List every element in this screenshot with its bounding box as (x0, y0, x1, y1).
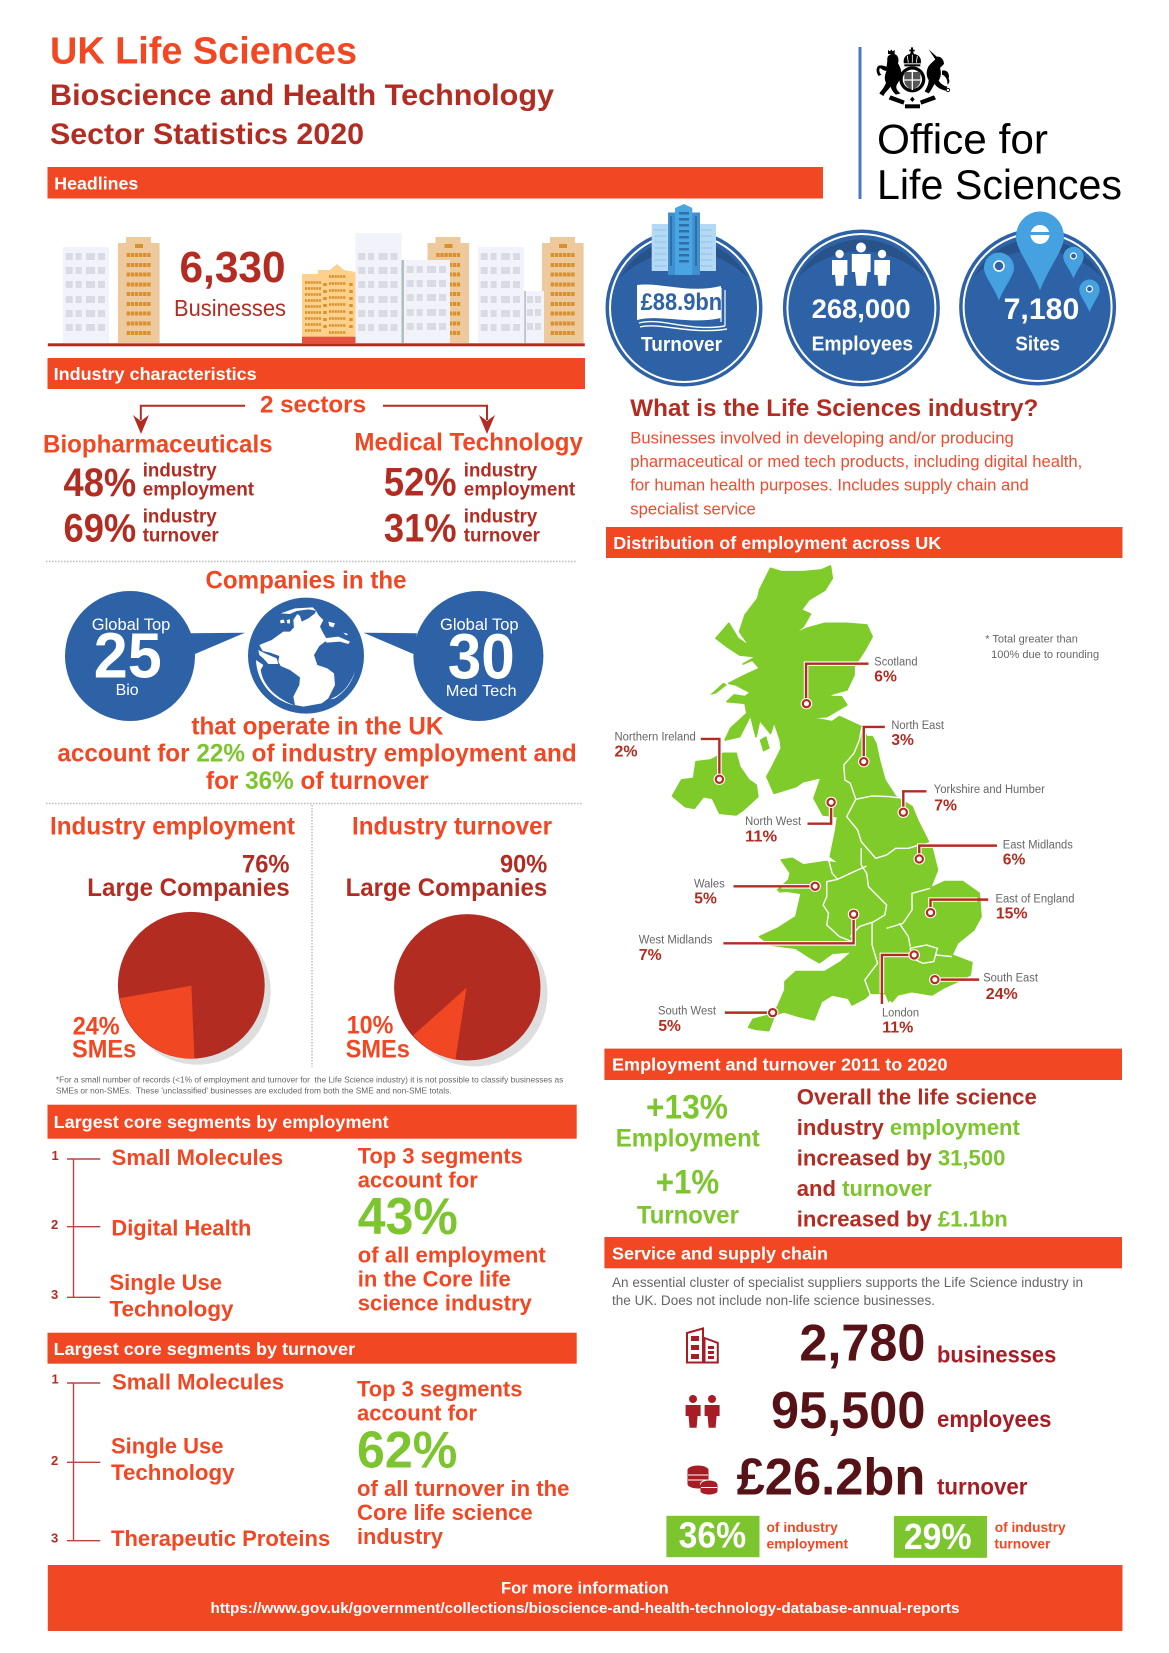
badge: employees: Employees (812, 334, 913, 356)
badge: employees: 268,000 (812, 294, 911, 324)
callout: global top 30 med tech: Med Tech (446, 683, 517, 700)
panel: medical technology: industry (464, 461, 538, 482)
callout: global top 30 med tech: 30 (448, 620, 515, 692)
text block: supply chain description: the UK. Does not include non-life science businesses. (612, 1293, 935, 1308)
section bar: largest core segments by turnover: Largest core segments by turnover (54, 1339, 355, 1359)
text block: supply chain description (612, 1275, 1083, 1308)
ranking: turnover segments: Single Use (111, 1433, 224, 1458)
ranking: turnover segments: 2 (51, 1453, 58, 1468)
ranking: turnover segments: 3 (51, 1531, 58, 1546)
badge: sites: Sites (1015, 334, 1060, 356)
icon: location pins (984, 212, 1100, 312)
ranking: turnover segments: 1 (52, 1371, 59, 1386)
region labels: 2% (614, 744, 638, 761)
pie chart: employment (118, 912, 271, 1065)
stat: 6,330 businesses: 6,330 (180, 243, 286, 292)
section bar: employment and turnover (604, 1049, 1122, 1080)
panel: industry turnover pie: 10% (347, 1011, 393, 1039)
heading: 2 sectors with arrows: 2 sectors (260, 391, 366, 418)
section bar: largest core segments by employment (48, 1105, 577, 1139)
footnote: unclassified businesses (56, 1076, 563, 1096)
panel: industry employment pie (50, 812, 296, 1065)
panel: medical technology (354, 429, 583, 551)
text block: overall increase: Overall the life science (797, 1084, 1037, 1110)
callout leaders (719, 664, 977, 1013)
stat box: 29% of industry turnover: 29% (904, 1516, 972, 1557)
region labels: Yorkshire and Humber (934, 784, 1045, 796)
text block: top 3 segments 43%: 43% (358, 1188, 458, 1246)
badge: sites (959, 212, 1116, 386)
region labels: South West (658, 1006, 717, 1018)
stat: businesses (687, 1315, 1056, 1373)
section bar: largest core segments by employment: Largest core segments by employment (54, 1112, 389, 1132)
callout: global top 30 med tech (364, 591, 543, 721)
panel: biopharmaceuticals: Biopharmaceuticals (43, 430, 273, 458)
text block: overall increase: increased by 31,500 (797, 1146, 1005, 1170)
region labels: North East (891, 720, 945, 732)
text block: top 3 segments 62% (357, 1377, 569, 1549)
panel: biopharmaceuticals (43, 430, 273, 551)
panel: medical technology: employment (464, 480, 576, 501)
callout: global top 25 bio: Global Top (92, 615, 170, 634)
stat: turnover: turnover (937, 1473, 1028, 1499)
region labels: East Midlands (1003, 839, 1073, 851)
stat: 6,330 businesses (174, 243, 286, 321)
stat: employees: employees (937, 1406, 1052, 1432)
text block: top 3 segments 43%: in the Core life (358, 1267, 511, 1292)
ranking: employment segments: 3 (51, 1287, 58, 1302)
region labels: 7% (934, 798, 957, 815)
panel: industry turnover pie: Industry turnover (352, 812, 552, 840)
panel: biopharmaceuticals: turnover (143, 526, 219, 547)
stat box: 29% of industry turnover: of industry (995, 1519, 1066, 1535)
region labels: North West (745, 816, 802, 828)
panel: medical technology: 31% (384, 507, 457, 551)
icon: globe (248, 598, 364, 714)
text block: what is the life sciences industry (630, 395, 1082, 518)
panel: industry turnover pie: 90% (500, 851, 547, 879)
icon: royal coat of arms (877, 47, 950, 108)
ranking: turnover segments (51, 1369, 330, 1551)
text block: what is the life sciences industry: specialist service (630, 499, 756, 518)
map note (985, 634, 1099, 661)
section bar: employment and turnover: Employment and turnover 2011 to 2020 (612, 1054, 948, 1074)
panel: global top companies (57, 566, 577, 795)
badge: employees (783, 230, 940, 386)
badge: sites: 7,180 (1004, 293, 1079, 326)
logo: Office for Life Sciences: Life Sciences (877, 161, 1122, 208)
section bar: service and supply chain (604, 1237, 1122, 1268)
ranking: employment segments: Technology (110, 1297, 234, 1322)
title (50, 30, 554, 151)
map note: * Total greater than (985, 634, 1078, 646)
text block: top 3 segments 43%: Top 3 segments (358, 1143, 523, 1168)
icon: two people (686, 1395, 720, 1428)
text block: overall increase: and turnover (797, 1176, 932, 1201)
badge: turnover (606, 204, 762, 386)
region labels: 24% (986, 986, 1018, 1003)
panel: biopharmaceuticals: employment (143, 480, 255, 501)
badge: turnover: Turnover (641, 334, 722, 356)
region labels: 5% (694, 891, 717, 908)
text block: overall increase: increased by £1.1bn (797, 1206, 1008, 1232)
map: UK employment by region (614, 566, 1099, 1036)
stats: employment and turnover growth: Turnover (637, 1202, 739, 1230)
region labels: 15% (996, 906, 1028, 923)
panel: medical technology: industry (464, 507, 538, 528)
text block: top 3 segments 62%: of all turnover in the (357, 1476, 569, 1501)
ranking: turnover segments: Therapeutic Proteins (111, 1526, 330, 1551)
section bar: service and supply chain: Service and supply chain (612, 1244, 828, 1264)
stat: 6,330 businesses: Businesses (174, 295, 286, 321)
text block: what is the life sciences industry: for human health purposes. Includes supply chain and (630, 476, 1029, 495)
panel: global top companies: for 36% of turnover (206, 767, 429, 795)
ranking: employment segments (51, 1145, 283, 1322)
text block: what is the life sciences industry: Businesses involved in developing and/or producing (630, 429, 1014, 448)
logo: Office for Life Sciences (858, 47, 1122, 208)
text block: top 3 segments 43%: account for (358, 1167, 478, 1192)
region labels (614, 656, 1074, 1036)
ranking: turnover segments: Technology (111, 1460, 235, 1485)
panel: biopharmaceuticals: industry (143, 507, 217, 528)
stats: employment and turnover growth: +13% (646, 1089, 728, 1127)
panel: industry employment pie: Industry employment (50, 812, 296, 840)
skyline: businesses illustration (48, 233, 585, 346)
stat: employees: 95,500 (771, 1382, 925, 1440)
region labels: Scotland (874, 656, 918, 668)
region labels: West Midlands (639, 935, 713, 947)
section bar: distribution of employment (606, 527, 1122, 558)
region labels: 6% (1003, 852, 1025, 869)
region labels: 11% (745, 828, 777, 845)
logo: Office for Life Sciences: Office for (877, 116, 1048, 163)
footer: more information: For more information (501, 1578, 669, 1597)
section bar: Industry characteristics: Industry characteristics (54, 364, 257, 384)
text block: top 3 segments 62%: industry (357, 1524, 444, 1549)
ranking: employment segments: Single Use (110, 1270, 222, 1295)
icon: banknotes (637, 285, 727, 331)
footer: more information (48, 1565, 1122, 1631)
stat box: 36% of industry employment (666, 1514, 848, 1557)
panel: industry employment pie: 24% (73, 1012, 120, 1040)
stat: turnover (688, 1448, 1028, 1506)
callout: global top 30 med tech: Global Top (440, 615, 519, 634)
stats: employment and turnover growth: Employment (616, 1125, 760, 1153)
stats: employment and turnover growth (616, 1089, 760, 1230)
panel: industry turnover pie (346, 812, 552, 1066)
section bar: Headlines (48, 167, 823, 198)
region labels: East of England (996, 894, 1074, 906)
stat: businesses: businesses (937, 1342, 1056, 1368)
panel: industry employment pie: 76% (242, 851, 290, 879)
title: Bioscience and Health Technology (50, 79, 554, 112)
stat box: 36% of industry employment: of industry (766, 1519, 838, 1535)
panel: biopharmaceuticals: 48% (64, 461, 136, 505)
icon: three people (832, 242, 890, 286)
region labels: Wales (694, 878, 725, 890)
ranking: employment segments: 1 (52, 1148, 59, 1163)
pie chart: turnover (394, 914, 548, 1066)
callout: global top 25 bio: 25 (94, 620, 162, 692)
callout: global top 25 bio: Bio (116, 682, 139, 699)
icon: coins (688, 1466, 718, 1495)
region labels: 3% (891, 732, 914, 749)
panel: industry turnover pie: Large Companies (346, 874, 547, 902)
stat: turnover: £26.2bn (737, 1448, 925, 1506)
ranking: employment segments: 2 (51, 1217, 58, 1232)
region labels: 11% (882, 1019, 913, 1036)
text block: what is the life sciences industry: pharmaceutical or med tech products, including digital health, (630, 452, 1082, 471)
stat box: 29% of industry turnover: turnover (994, 1536, 1051, 1552)
text block: supply chain description: An essential cluster of specialist suppliers supports the Life Science industry in (612, 1275, 1083, 1290)
icon: building (687, 1328, 718, 1362)
region labels: Northern Ireland (614, 731, 696, 743)
footer: more information: https://www.gov.uk/government/collections/bioscience-and-health-technology-database-annual-reports (210, 1600, 960, 1617)
text block: top 3 segments 43%: of all employment (358, 1243, 546, 1268)
panel: global top companies: Companies in the (206, 566, 407, 594)
section bar: Headlines: Headlines (54, 173, 139, 193)
stats: employment and turnover growth: +1% (656, 1164, 719, 1202)
ranking: employment segments: Small Molecules (112, 1145, 283, 1170)
panel: medical technology: turnover (464, 526, 541, 547)
stat box: 36% of industry employment: 36% (679, 1514, 746, 1555)
section bar: largest core segments by turnover (48, 1333, 577, 1364)
section bar: Industry characteristics (48, 358, 585, 389)
text block: overall increase: industry employment (797, 1115, 1020, 1140)
text block: top 3 segments 62%: 62% (357, 1421, 457, 1479)
footnote: unclassified businesses: *For a small number of records (<1% of employment and turnover for the Life Science industry) it is not possible to classify businesses as (56, 1076, 563, 1085)
title: UK Life Sciences (50, 30, 357, 72)
footnote: unclassified businesses: SMEs or non-SMEs. These 'unclassified' businesses are excluded from both the SME and non-SME totals. (56, 1087, 452, 1096)
ranking: turnover segments: Small Molecules (112, 1369, 284, 1394)
text block: top 3 segments 43% (358, 1143, 546, 1316)
stat: employees (686, 1382, 1052, 1440)
panel: biopharmaceuticals: industry (143, 461, 217, 482)
panel: global top companies: that operate in the UK (191, 712, 443, 740)
text block: top 3 segments 62%: Top 3 segments (357, 1377, 522, 1402)
text block: what is the life sciences industry: What is the Life Sciences industry? (630, 395, 1038, 422)
panel: global top companies: account for 22% of industry employment and (57, 740, 577, 768)
region labels: 7% (639, 947, 662, 964)
title: Sector Statistics 2020 (50, 118, 364, 151)
panel: medical technology: Medical Technology (354, 429, 583, 457)
heading: 2 sectors with arrows (133, 391, 495, 434)
ranking: employment segments: Digital Health (111, 1216, 251, 1241)
callout: global top 25 bio (65, 591, 245, 721)
region labels: London (882, 1007, 919, 1019)
section bar: distribution of employment: Distribution of employment across UK (613, 533, 942, 553)
panel: industry employment pie: SMEs (72, 1036, 136, 1064)
map shape: Northern Ireland (673, 753, 758, 815)
panel: industry employment pie: Large Companies (87, 874, 290, 902)
text block: top 3 segments 43%: science industry (358, 1291, 533, 1316)
badge: turnover: £88.9bn (641, 289, 722, 316)
text block: overall increase (797, 1084, 1037, 1232)
region labels: South East (983, 972, 1039, 984)
text block: top 3 segments 62%: Core life science (357, 1500, 533, 1525)
text block: top 3 segments 62%: account for (357, 1401, 477, 1426)
panel: medical technology: 52% (384, 461, 457, 505)
stat: businesses: 2,780 (799, 1315, 925, 1373)
map shape: Great Britain (716, 566, 981, 1031)
map note: 100% due to rounding (991, 649, 1099, 661)
panel: biopharmaceuticals: 69% (64, 507, 136, 551)
panel: industry turnover pie: SMEs (346, 1035, 410, 1063)
icon: office tower (652, 204, 716, 275)
region labels: 6% (874, 669, 897, 686)
stat box: 29% of industry turnover (894, 1516, 1066, 1558)
stat box: 36% of industry employment: employment (766, 1536, 848, 1552)
region labels: 5% (658, 1018, 681, 1035)
